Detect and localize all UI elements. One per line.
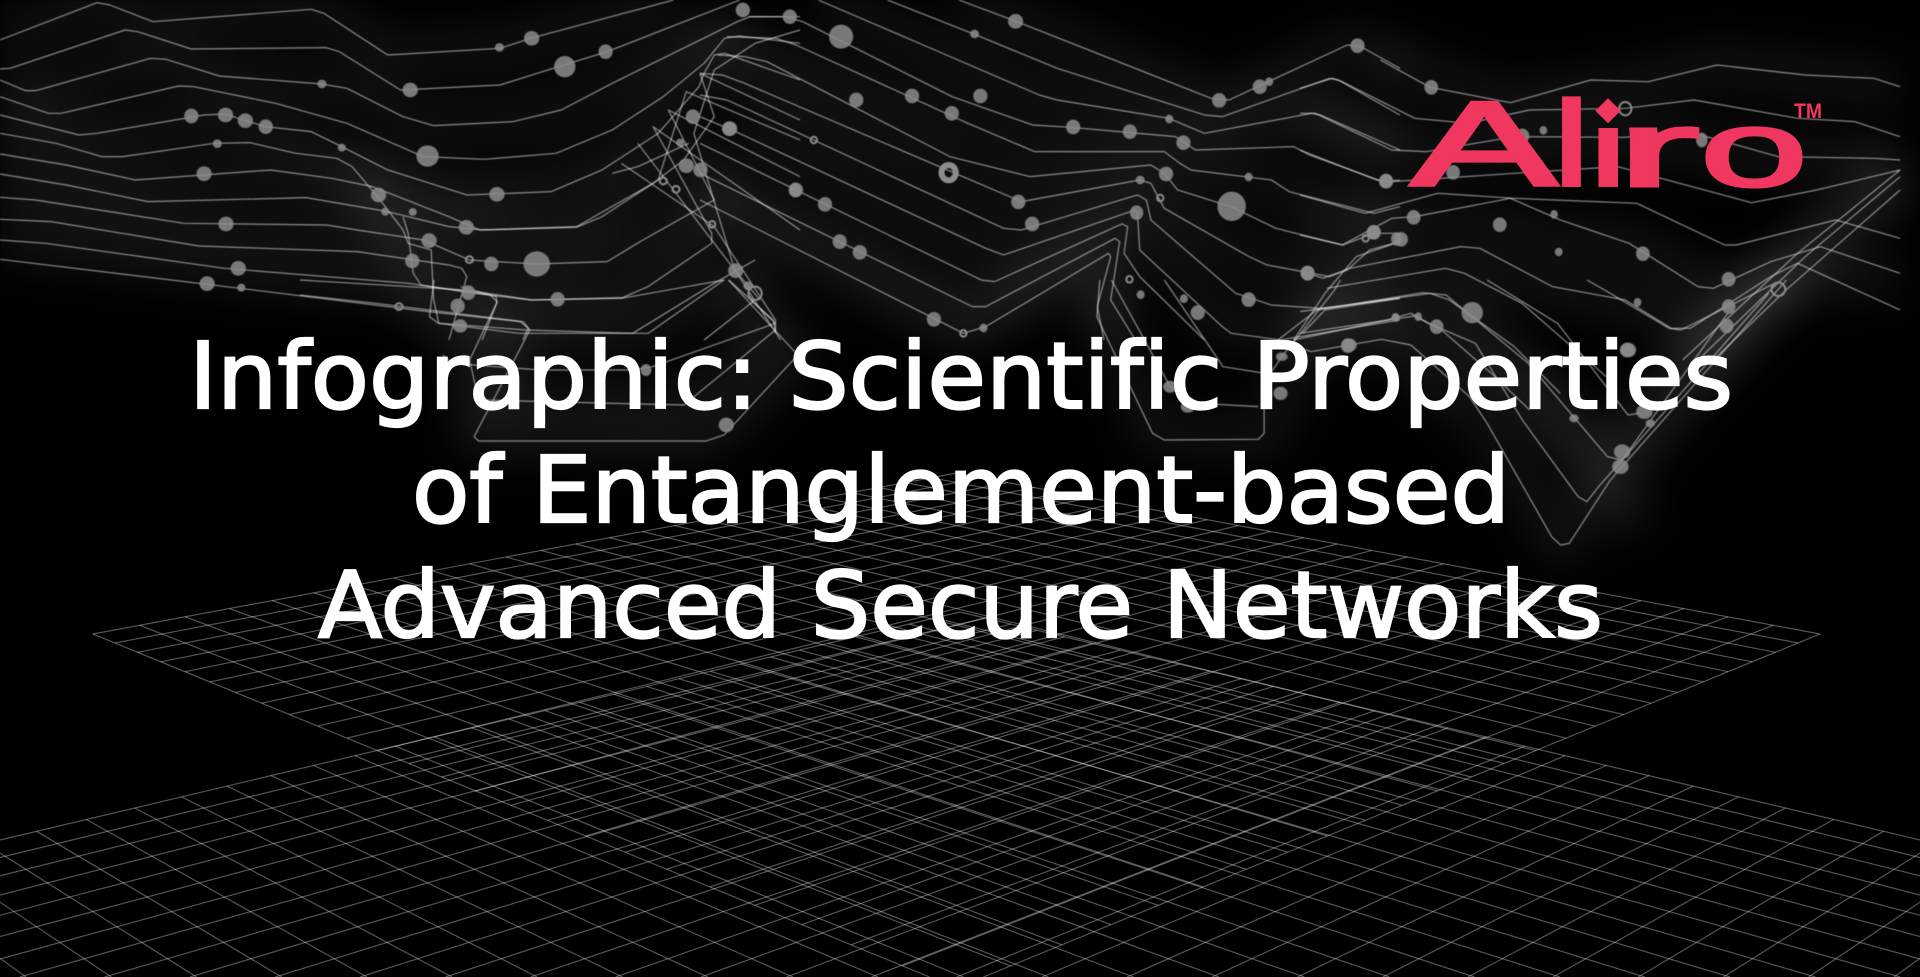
dots on centre lines [722, 14, 1402, 332]
dots on left lines [184, 3, 801, 333]
rings on right lines [1619, 102, 1785, 296]
dots behind title right [1163, 338, 1655, 474]
centre wave lines [700, 0, 1400, 340]
lower left fold lines [300, 280, 798, 441]
title [189, 325, 1733, 659]
upper grid plane [93, 473, 1820, 977]
title: Advanced Secure Networks [318, 552, 1603, 659]
lower grid plane [0, 612, 1920, 977]
rings on centre lines [811, 137, 1369, 337]
right wave lines [1300, 60, 1900, 410]
left wave lines [0, 0, 800, 340]
Aliro logo: TM [1794, 100, 1822, 123]
rings on left lines [395, 178, 762, 310]
lower right valley lines [1097, 280, 1786, 545]
dots behind title left [641, 364, 734, 432]
title: of Entanglement-based [412, 437, 1510, 544]
title: Infographic: Scientific Properties [189, 325, 1733, 430]
haze glow behind lines [0, 0, 1900, 545]
Aliro logo [1406, 90, 1822, 200]
dots on right lines [1301, 80, 1736, 357]
